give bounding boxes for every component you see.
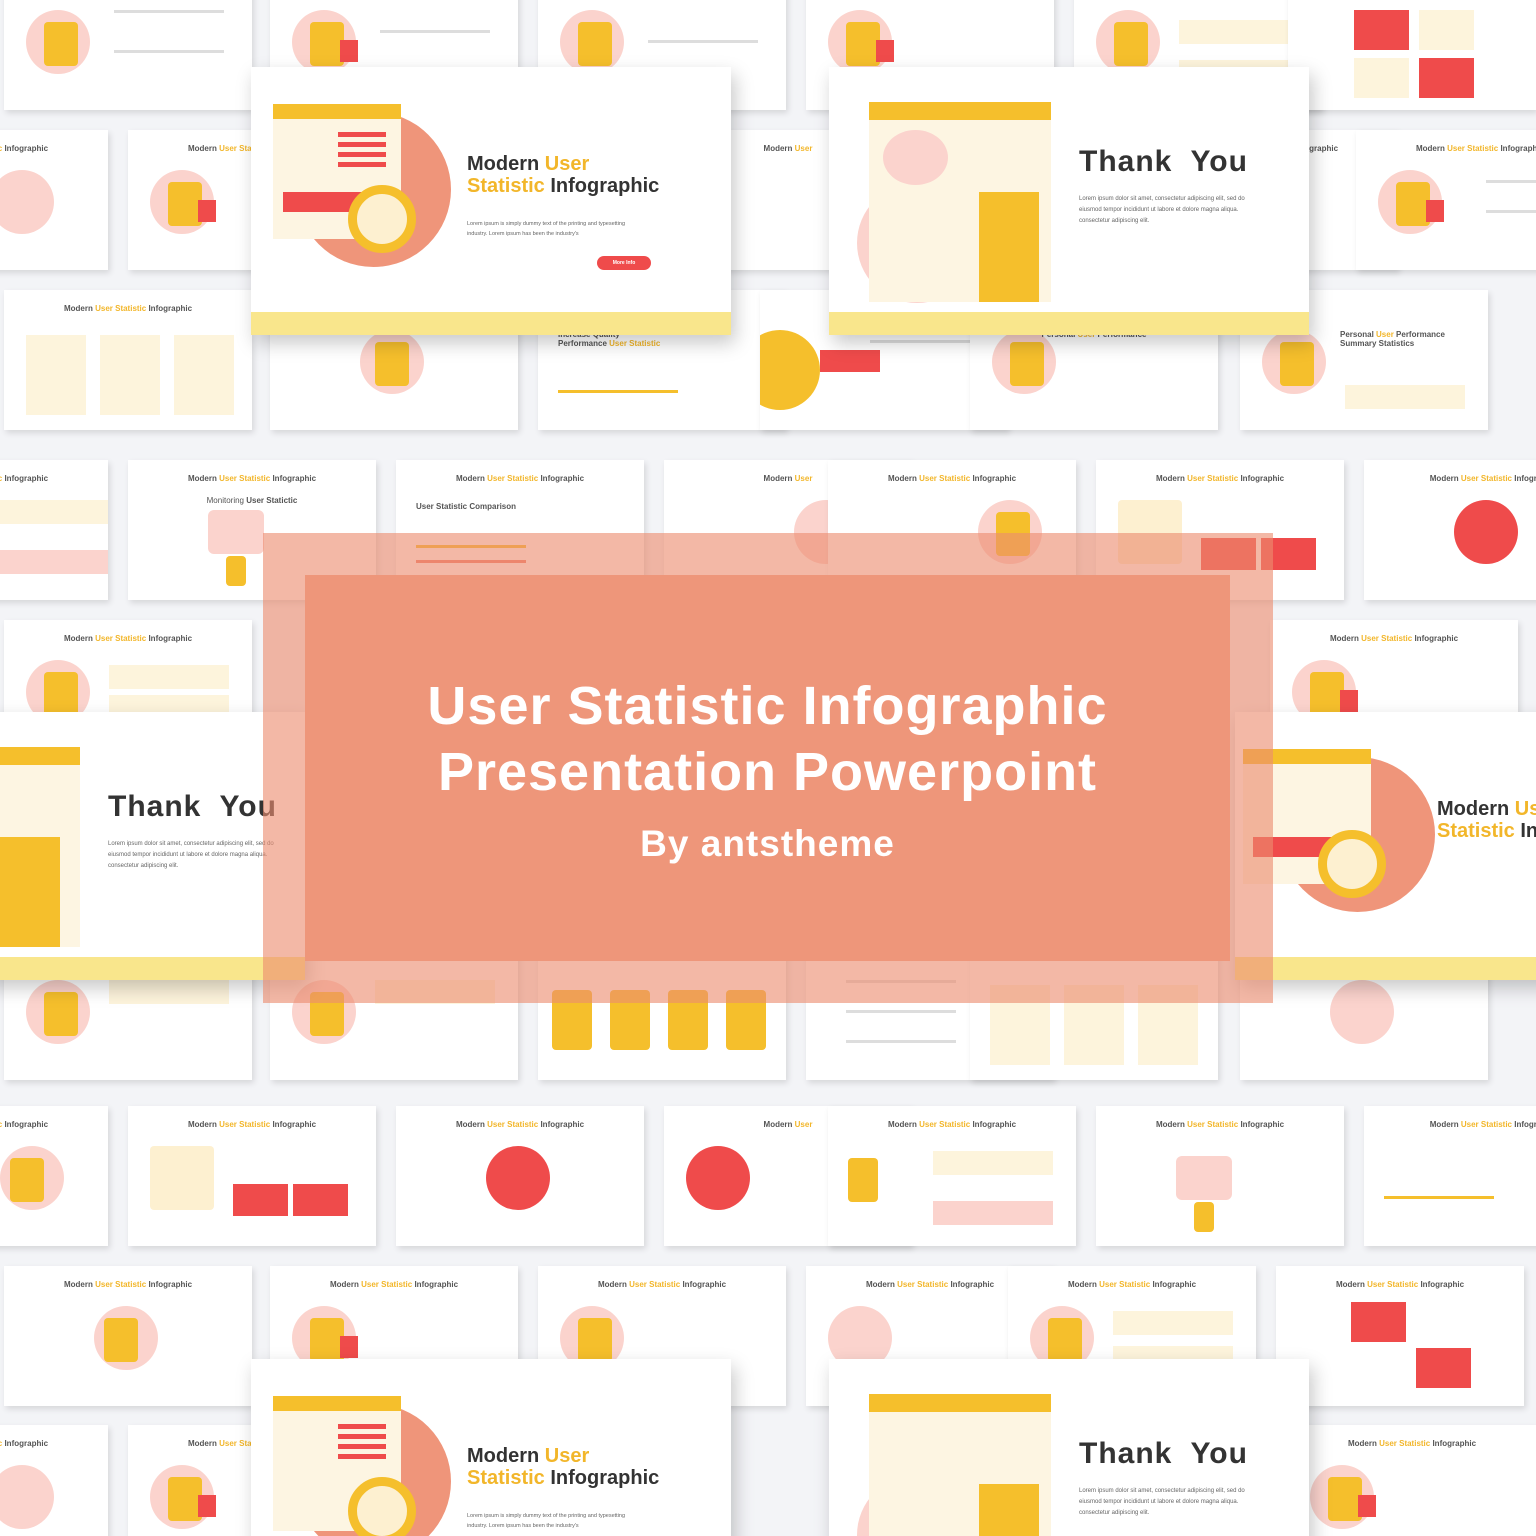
background slide grid: Modern User	[764, 144, 812, 153]
background slide grid: Modern User Statistic Infographic	[1210, 144, 1338, 153]
background slide grid: Modern User Statistic Infographic	[1336, 1280, 1464, 1289]
big slide: thank you middle left: consectetur adipiscing elit.	[108, 863, 178, 869]
big slide: thank you top: eiusmod tempor incididunt ut labore et dolore magna aliqua.	[1079, 207, 1238, 213]
row 8	[4, 1266, 252, 1406]
background slide grid: Performance User Statistic	[558, 339, 660, 348]
background slide grid: Modern User Statistic Infographic	[456, 474, 584, 483]
big slide: thank you bottom: eiusmod tempor incididunt ut labore et dolore magna aliqua.	[1079, 1499, 1238, 1505]
big slide: modern bottom: industry. Lorem ipsum has been the industry's	[467, 1523, 579, 1529]
row 1	[0, 130, 108, 270]
title: Presentation Powerpoint	[438, 742, 1097, 802]
big slide: thank you middle left	[0, 712, 305, 980]
big slide: thank you bottom: consectetur adipiscing elit.	[1079, 1510, 1149, 1516]
big slide: thank you middle left: eiusmod tempor incididunt ut labore et dolore magna aliqua.	[108, 852, 267, 858]
big slide: thank you top: Thank You	[1079, 145, 1248, 178]
big slide: modern top: More Info	[613, 260, 635, 266]
big slide: thank you bottom	[829, 1359, 1309, 1536]
background slide grid: Modern User Statistic Infographic	[456, 1120, 584, 1129]
background slide grid: Modern User Statistic Infographic	[866, 1280, 994, 1289]
row 4: Modern User Statistic Infographic	[64, 634, 192, 643]
title	[427, 676, 1108, 802]
big slide: thank you bottom: Thank You	[1079, 1437, 1248, 1470]
row 9	[0, 1425, 108, 1536]
title: User Statistic Infographic	[427, 676, 1108, 736]
row 3	[0, 460, 108, 600]
background slide grid: Modern User Statistic Infographic	[1348, 1439, 1476, 1448]
row 8: Modern User Statistic Infographic	[64, 1280, 192, 1289]
background slide grid: Personal User Performance	[1340, 330, 1445, 339]
background slide grid: Modern User Statistic Infographic	[1068, 1280, 1196, 1289]
row 2	[4, 290, 252, 430]
row 4	[4, 620, 252, 760]
big slide: modern top: Statistic Infographic	[467, 175, 659, 197]
background slide grid: Modern User Statistic Infographic	[1330, 634, 1458, 643]
background slide grid: Modern User	[764, 474, 812, 483]
big slide: modern middle right	[1235, 712, 1536, 980]
background slide grid: Modern User Statistic Infographic	[1156, 474, 1284, 483]
row 2: Modern User Statistic Infographic	[64, 304, 192, 313]
big slide: modern top	[251, 67, 731, 335]
background slide grid: Modern User Statistic Infographic	[188, 1120, 316, 1129]
background slide grid: Increase Quality	[558, 330, 620, 339]
row 0	[4, 0, 252, 110]
background slide grid: Modern User Statistic Infographic	[188, 144, 316, 153]
background slide grid: Modern User Statistic Infographic	[888, 474, 1016, 483]
big slide: modern bottom: Lorem ipsum is simply dummy text of the printing and typesetting	[467, 1513, 625, 1519]
big slide: thank you top: Lorem ipsum dolor sit amet, consectetur adipiscing elit, sed do	[1079, 196, 1245, 202]
big slide: modern top: industry. Lorem ipsum has been the industry's	[467, 231, 579, 237]
banner: title card	[305, 575, 1230, 961]
big slide: modern bottom	[251, 1359, 731, 1536]
background slide grid: Modern User Statistic Infographic	[598, 1280, 726, 1289]
background slide grid: Summary Statistics	[1340, 339, 1414, 348]
big slide: modern top: Lorem ipsum is simply dummy text of the printing and typesetting	[467, 221, 625, 227]
banner outer translucent frame	[263, 533, 1273, 1003]
background slide grid: Modern User	[764, 1120, 812, 1129]
background slide grid: Modern User Statistic Infographic	[188, 474, 316, 483]
row 6	[4, 940, 252, 1080]
background slide grid: Personal User Performance	[1042, 330, 1146, 339]
background slide grid: User Statistic Comparison	[416, 502, 516, 511]
big slide: thank you middle left: Lorem ipsum dolor sit amet, consectetur adipiscing elit, sed do	[108, 841, 274, 847]
background slide grid: Modern User Statistic Infographic	[888, 1120, 1016, 1129]
subtitle: By antstheme	[640, 823, 895, 864]
big slide: thank you top	[829, 67, 1309, 335]
background slide grid: Modern User Statistic Infographic	[188, 1439, 316, 1448]
big slide: modern bottom: Statistic Infographic	[467, 1467, 659, 1489]
big slide: thank you top: consectetur adipiscing elit.	[1079, 218, 1149, 224]
big slide: modern top: Modern User	[467, 153, 589, 175]
background slide grid: Monitoring User Statictic	[207, 496, 297, 505]
background slide grid: Modern User Statistic Infographic	[1156, 1120, 1284, 1129]
big slide: thank you bottom: Lorem ipsum dolor sit amet, consectetur adipiscing elit, sed do	[1079, 1488, 1245, 1494]
big slide: thank you middle left: Thank You	[108, 790, 277, 823]
row 7	[0, 1106, 108, 1246]
big slide: modern bottom: Modern User	[467, 1445, 589, 1467]
background slide grid: Modern User Statistic Infographic	[330, 1280, 458, 1289]
